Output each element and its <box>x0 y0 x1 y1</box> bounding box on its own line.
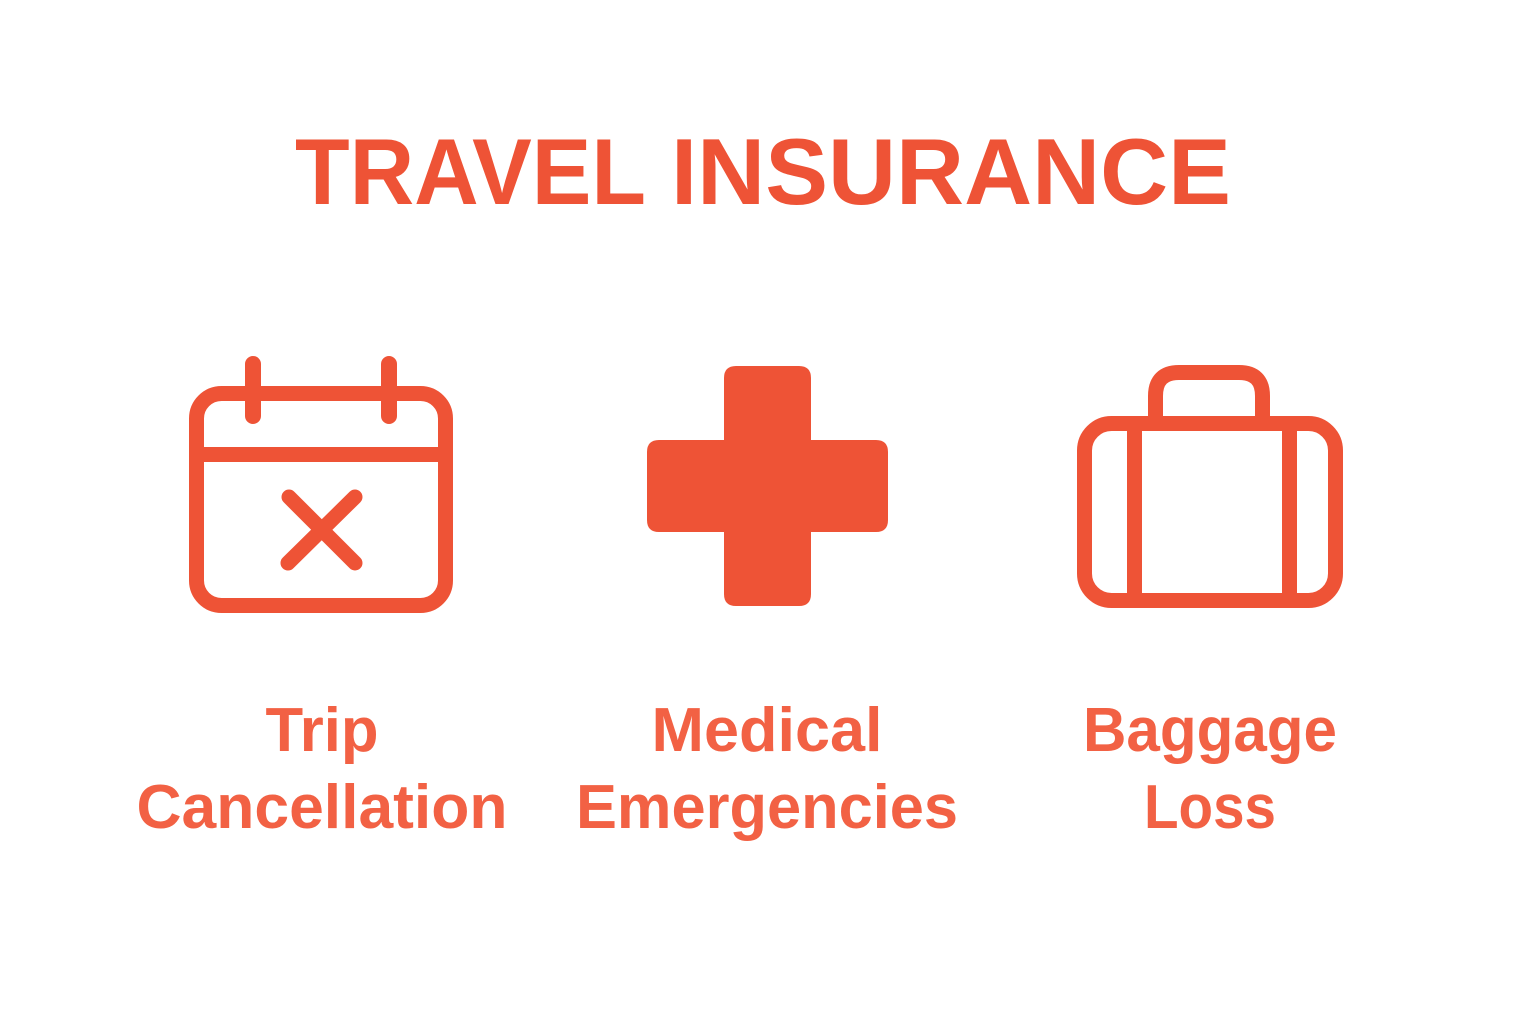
label: medical emergencies <box>576 696 958 842</box>
label: trip cancellation <box>136 696 508 842</box>
icon: calendar with X <box>196 364 446 606</box>
label: baggage loss <box>1083 696 1337 842</box>
label: trip cancellation: Cancellation <box>136 773 508 842</box>
label: baggage loss: Loss <box>1144 773 1276 842</box>
icon: suitcase <box>1084 372 1336 600</box>
label: medical emergencies: Medical <box>652 696 882 765</box>
title <box>295 119 1231 224</box>
label: baggage loss: Baggage <box>1083 696 1337 765</box>
label: trip cancellation: Trip <box>266 696 378 765</box>
title: TRAVEL <box>295 119 646 224</box>
title: INSURANCE <box>671 119 1231 224</box>
label: medical emergencies: Emergencies <box>576 773 958 842</box>
icon: medical cross <box>647 366 888 606</box>
